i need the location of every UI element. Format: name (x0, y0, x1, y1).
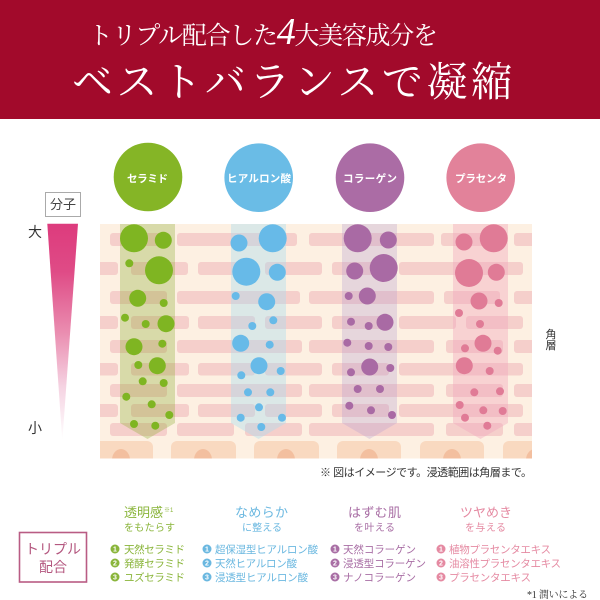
benefit: hyaluronic acid: に整える (242, 521, 282, 534)
benefit: placenta (436, 505, 561, 584)
badge: hyaluronic acid: ヒアルロン酸 (227, 172, 292, 185)
header banner (0, 0, 600, 119)
benefit: hyaluronic acid: なめらか (235, 505, 288, 520)
column: collagen penetration (342, 224, 398, 439)
benefit: ceramide: 3 (113, 574, 117, 582)
benefit: placenta: ツヤめき (460, 505, 512, 520)
gradient wedge (47, 224, 78, 441)
benefit: ceramide: 2 (113, 560, 117, 568)
benefit: hyaluronic acid (202, 505, 318, 584)
benefit: ceramide: ユズセラミド (124, 571, 185, 584)
badge: placenta (446, 143, 515, 212)
benefit: collagen: ナノコラーゲン (343, 572, 416, 584)
benefit: placenta: 植物プラセンタエキス (449, 543, 551, 556)
benefit: placenta: 3 (439, 574, 443, 582)
column: ceramide penetration (120, 224, 175, 439)
benefit: placenta: プラセンタエキス (449, 572, 531, 584)
benefit: hyaluronic acid: 天然ヒアルロン酸 (215, 557, 298, 570)
benefit: ceramide: 発酵セラミド (124, 557, 185, 570)
label large: 大 (28, 224, 42, 240)
benefit: placenta: 油溶性プラセンタエキス (449, 557, 561, 570)
stratum corneum label (546, 328, 556, 352)
benefit: collagen: 2 (333, 560, 337, 568)
stratum corneum label: 層 (546, 339, 556, 352)
molecule size scale (28, 192, 80, 441)
benefit: hyaluronic acid: 2 (205, 560, 209, 568)
benefit: ceramide: 透明感 (124, 505, 163, 520)
benefit: collagen: を叶える (354, 522, 395, 534)
badge: hyaluronic acid (224, 143, 293, 212)
ingredient badges (114, 143, 515, 212)
title line 1: トリプル配合した4大美容成分を (88, 11, 438, 53)
label small: 小 (28, 420, 42, 436)
benefit: placenta: を与える (465, 521, 506, 534)
triple blend box (20, 532, 86, 582)
skin diagram (100, 224, 532, 458)
benefit: collagen: 浸透型コラーゲン (343, 557, 426, 570)
column: hyaluronic acid penetration (230, 224, 287, 439)
stratum corneum label: 角 (546, 328, 556, 341)
benefit: hyaluronic acid: 3 (205, 574, 209, 582)
benefit: ceramide: をもたらす (124, 522, 175, 534)
badge: ceramide: セラミド (127, 173, 168, 185)
column: placenta penetration (453, 224, 508, 439)
badge: placenta: プラセンタ (455, 173, 507, 185)
badge: collagen: コラーゲン (343, 172, 397, 185)
benefit: placenta: 1 (439, 546, 443, 554)
benefit: collagen: 天然コラーゲン (343, 543, 416, 556)
basal cells (100, 441, 532, 458)
triple blend box: 配合 (39, 559, 67, 575)
corneocyte bricks (90, 233, 544, 436)
benefit: ceramide (110, 505, 185, 584)
benefit: hyaluronic acid: 浸透型ヒアルロン酸 (215, 571, 308, 584)
benefit: placenta: 2 (439, 560, 443, 568)
benefit: hyaluronic acid: 1 (205, 546, 209, 554)
benefit: collagen: はずむ肌 (348, 505, 401, 520)
scale label box (46, 192, 80, 216)
scale label box: 分子 (50, 197, 76, 212)
benefit: ceramide: 1 (113, 546, 117, 554)
image note: ※ 図はイメージです。浸透範囲は角層まで。 (320, 465, 532, 479)
triple blend box: トリプル (25, 541, 81, 557)
badge: ceramide (114, 143, 182, 211)
benefit: ceramide: ※1 (164, 507, 174, 514)
benefit: ceramide: 天然セラミド (124, 543, 185, 556)
benefit: collagen (330, 505, 426, 584)
benefit: hyaluronic acid: 超保湿型ヒアルロン酸 (215, 543, 318, 556)
badge: collagen (336, 143, 404, 212)
title line 2: ベストバランスで凝縮 (72, 59, 512, 105)
benefit: collagen: 3 (333, 574, 337, 582)
benefit: collagen: 1 (333, 546, 337, 554)
